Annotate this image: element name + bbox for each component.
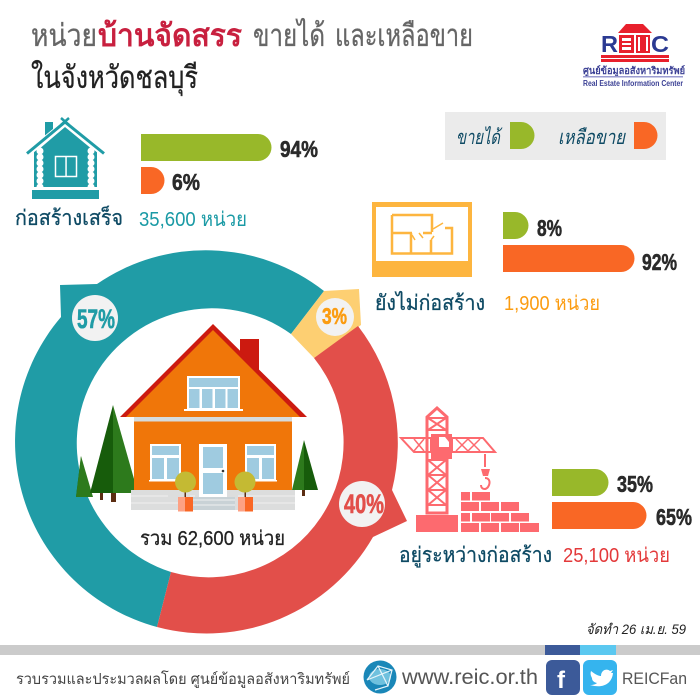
logo: REIC: Real Estate Information Center (583, 79, 683, 88)
bar: finished remaining 6% (141, 167, 200, 195)
logo: REIC: C (651, 31, 669, 57)
icon: facebook (546, 660, 580, 695)
label: not yet built: ยังไม่ก่อสร้าง (375, 291, 485, 315)
title: และเหลือขาย (335, 18, 473, 53)
legend: เหลือขาย (558, 127, 626, 149)
date note: จัดทำ 26 เม.ย. 59 (586, 621, 686, 637)
icon: floor plan (372, 202, 472, 277)
footer band (0, 645, 700, 655)
icon: twitter (583, 660, 617, 695)
callout: 57% (72, 295, 118, 341)
legend (445, 112, 666, 160)
footer credit: รวบรวมและประมวลผลโดย ศูนย์ข้อมูลอสังหาริมทรัพย์ (16, 670, 350, 688)
illustration: central house (76, 324, 318, 512)
bar: not built sold 8%: 8% (537, 215, 562, 241)
title: ในจังหวัดชลบุรี (31, 60, 198, 97)
website: www.reic.or.th (401, 666, 538, 689)
callout: 3% (316, 298, 354, 336)
bar: under construction sold 35%: 35% (617, 471, 653, 497)
callout: 40% (339, 481, 385, 527)
units: finished: 35,600 หน่วย (139, 209, 247, 231)
label: under construction: อยู่ระหว่างก่อสร้าง (399, 544, 552, 568)
logo: REIC: R (601, 31, 618, 57)
icon: crane and bricks (401, 408, 539, 532)
callout: 3%: 3% (322, 303, 347, 329)
bar: not built remaining 92% (503, 245, 677, 275)
bar: finished sold 94%: 94% (280, 136, 318, 162)
total label: รวม 62,600 หน่วย (140, 528, 285, 550)
facebook name: REICFan (622, 669, 687, 688)
icon: globe (364, 660, 396, 694)
title: บ้านจัดสรร (98, 18, 242, 53)
title: ขายได้ (253, 18, 325, 53)
segment: under construction 40% (157, 326, 407, 633)
icon: finished house (27, 118, 104, 199)
segment: not built 3% (291, 289, 361, 358)
callout: 57%: 57% (77, 304, 115, 334)
label: finished: ก่อสร้างเสร็จ (15, 204, 123, 230)
donut chart (15, 250, 407, 633)
segment: finished 57% (15, 250, 324, 627)
callout: 40%: 40% (344, 489, 384, 519)
bar: finished sold 94% (141, 134, 318, 162)
title: หน่วย (31, 18, 97, 53)
bar: under construction sold 35% (552, 469, 653, 497)
bar: not built remaining 92%: 92% (642, 249, 677, 275)
logo: REIC: ศูนย์ข้อมูลอสังหาริมทรัพย์ (583, 65, 685, 78)
icon: facebook: f (557, 667, 566, 694)
legend: ขายได้ (456, 126, 503, 149)
title (31, 18, 473, 97)
bar: finished remaining 6%: 6% (172, 169, 200, 195)
bar: under construction remaining 65% (552, 502, 692, 530)
units: not built: 1,900 หน่วย (504, 293, 600, 315)
units: under construction: 25,100 หน่วย (563, 545, 670, 567)
bar: not built sold 8% (503, 212, 562, 241)
logo: REIC (583, 24, 685, 88)
